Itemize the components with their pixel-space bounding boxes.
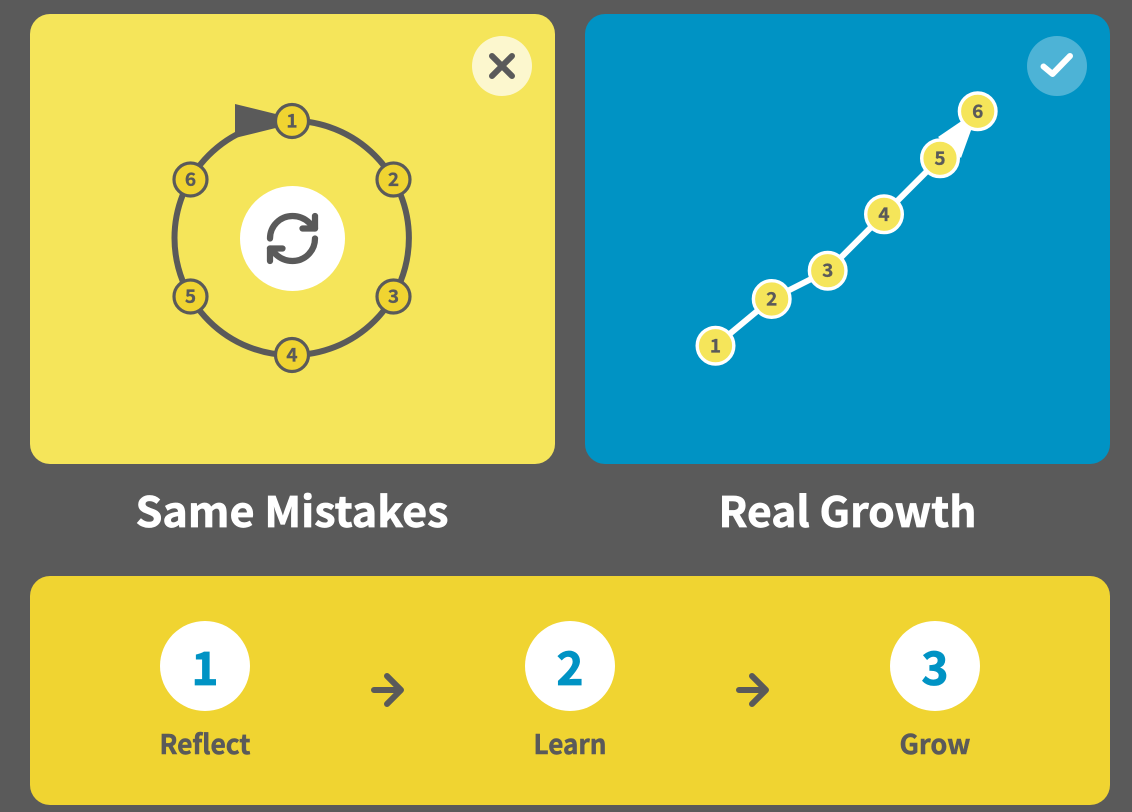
node 5: 5 bbox=[185, 282, 196, 309]
step 4 bbox=[866, 196, 902, 233]
step 2: 2 bbox=[766, 284, 777, 312]
node 2 bbox=[377, 163, 410, 196]
node 5 bbox=[174, 280, 207, 313]
panel: same mistakes bbox=[30, 14, 555, 464]
arrow: cycle head bbox=[235, 104, 304, 138]
step 4: 4 bbox=[878, 200, 890, 227]
node 1: 1 bbox=[286, 106, 298, 134]
step: reflect bbox=[160, 621, 250, 762]
node 1 bbox=[276, 104, 308, 138]
node 6 bbox=[174, 163, 207, 196]
node 3: 3 bbox=[388, 282, 399, 309]
step: learn bbox=[525, 621, 615, 762]
node 6: 6 bbox=[185, 165, 196, 192]
arrow: reflect to learn bbox=[374, 676, 401, 704]
step 6 bbox=[959, 93, 996, 130]
icon: check badge bbox=[1027, 36, 1087, 96]
growth path bbox=[697, 93, 996, 364]
heading: same mistakes: Same Mistakes bbox=[136, 479, 448, 540]
step 5 bbox=[922, 140, 958, 177]
icon: refresh bbox=[240, 186, 345, 291]
step 2 bbox=[753, 281, 790, 317]
panel: three steps bbox=[30, 576, 1110, 805]
arrow: growth head bbox=[938, 111, 978, 158]
node 4 bbox=[276, 338, 308, 372]
node 3 bbox=[377, 280, 410, 313]
step 5: 5 bbox=[934, 144, 946, 171]
node 2: 2 bbox=[388, 165, 399, 192]
node 4: 4 bbox=[286, 340, 298, 368]
panel: real growth bbox=[585, 14, 1110, 464]
step: learn: 2 bbox=[556, 633, 584, 699]
step 3: 3 bbox=[822, 256, 833, 283]
step: reflect: Reflect bbox=[160, 723, 250, 762]
icon: cross badge bbox=[472, 36, 532, 96]
step 1: 1 bbox=[710, 332, 721, 358]
step: grow: 3 bbox=[921, 633, 949, 699]
step: reflect: 1 bbox=[191, 633, 219, 699]
step 6: 6 bbox=[972, 97, 983, 124]
step 1 bbox=[697, 327, 734, 364]
arrow: learn to grow bbox=[739, 676, 766, 704]
cycle diagram bbox=[174, 104, 410, 372]
step: grow: Grow bbox=[900, 723, 970, 762]
step: grow bbox=[890, 621, 980, 762]
heading: real growth: Real Growth bbox=[718, 479, 976, 540]
step 3 bbox=[809, 252, 846, 289]
step: learn: Learn bbox=[534, 723, 606, 762]
